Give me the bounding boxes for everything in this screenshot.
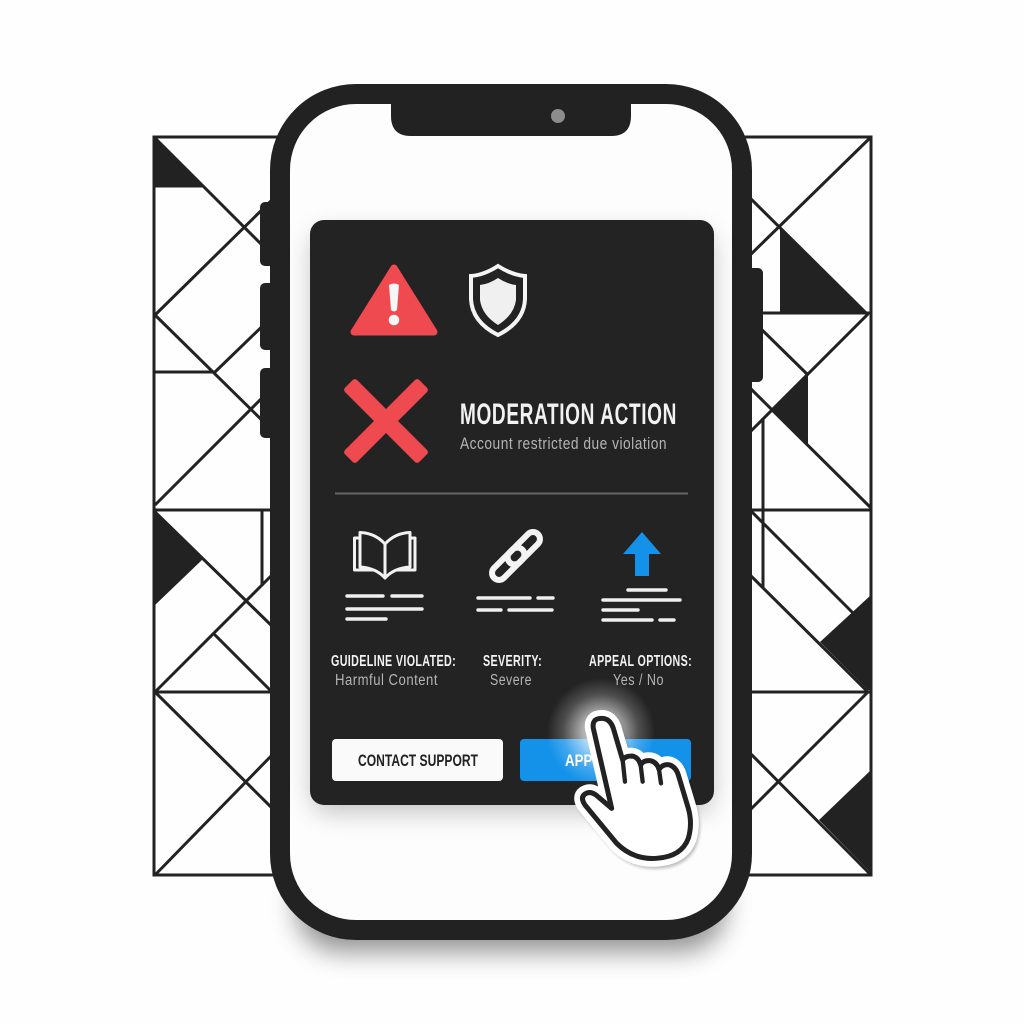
icon: blue up arrow [623,532,661,576]
geometric pattern backdrop [154,137,871,875]
hand black outline [582,718,690,858]
button: appeal [520,739,691,781]
icon: red X [343,378,429,464]
label: GUIDELINE VIOLATED: [331,653,456,670]
finger creases [623,760,661,783]
text lines [478,598,553,610]
divider [335,492,688,494]
moderation card [310,220,714,805]
phone shadow [296,860,726,952]
hand cursor [582,718,690,858]
pattern: frame and lines [154,137,871,875]
hand shadow [584,721,692,861]
label: SEVERITY: [483,653,542,670]
button: contact support [332,739,503,781]
button: contact support: CONTACT SUPPORT [358,751,478,770]
side button right [742,268,763,382]
column: appeal options [589,532,692,689]
column: guideline violated [331,532,456,689]
value: Yes / No [613,672,664,689]
value: Severe [490,672,532,689]
label: APPEAL OPTIONS: [589,653,692,670]
notch [391,104,631,136]
hand outer white outline [582,718,690,858]
heading: MODERATION ACTION [460,398,677,431]
icon: warning triangle [354,268,434,332]
card background [310,220,714,805]
phone [260,94,763,930]
subheading: Account restricted due violation [460,435,667,453]
pattern: black shapes [154,137,871,873]
column: severity [478,529,553,689]
icon: shield [471,266,525,335]
icon: open book [354,532,415,578]
icon: chain link [489,529,543,583]
text lines [347,596,422,619]
side buttons left [260,202,280,438]
tap glow [547,678,655,786]
camera [551,109,565,123]
text lines [603,590,680,620]
phone body [280,94,742,930]
button: appeal: APPEAL [565,751,619,770]
value: Harmful Content [335,672,438,689]
card shadow [312,232,712,812]
